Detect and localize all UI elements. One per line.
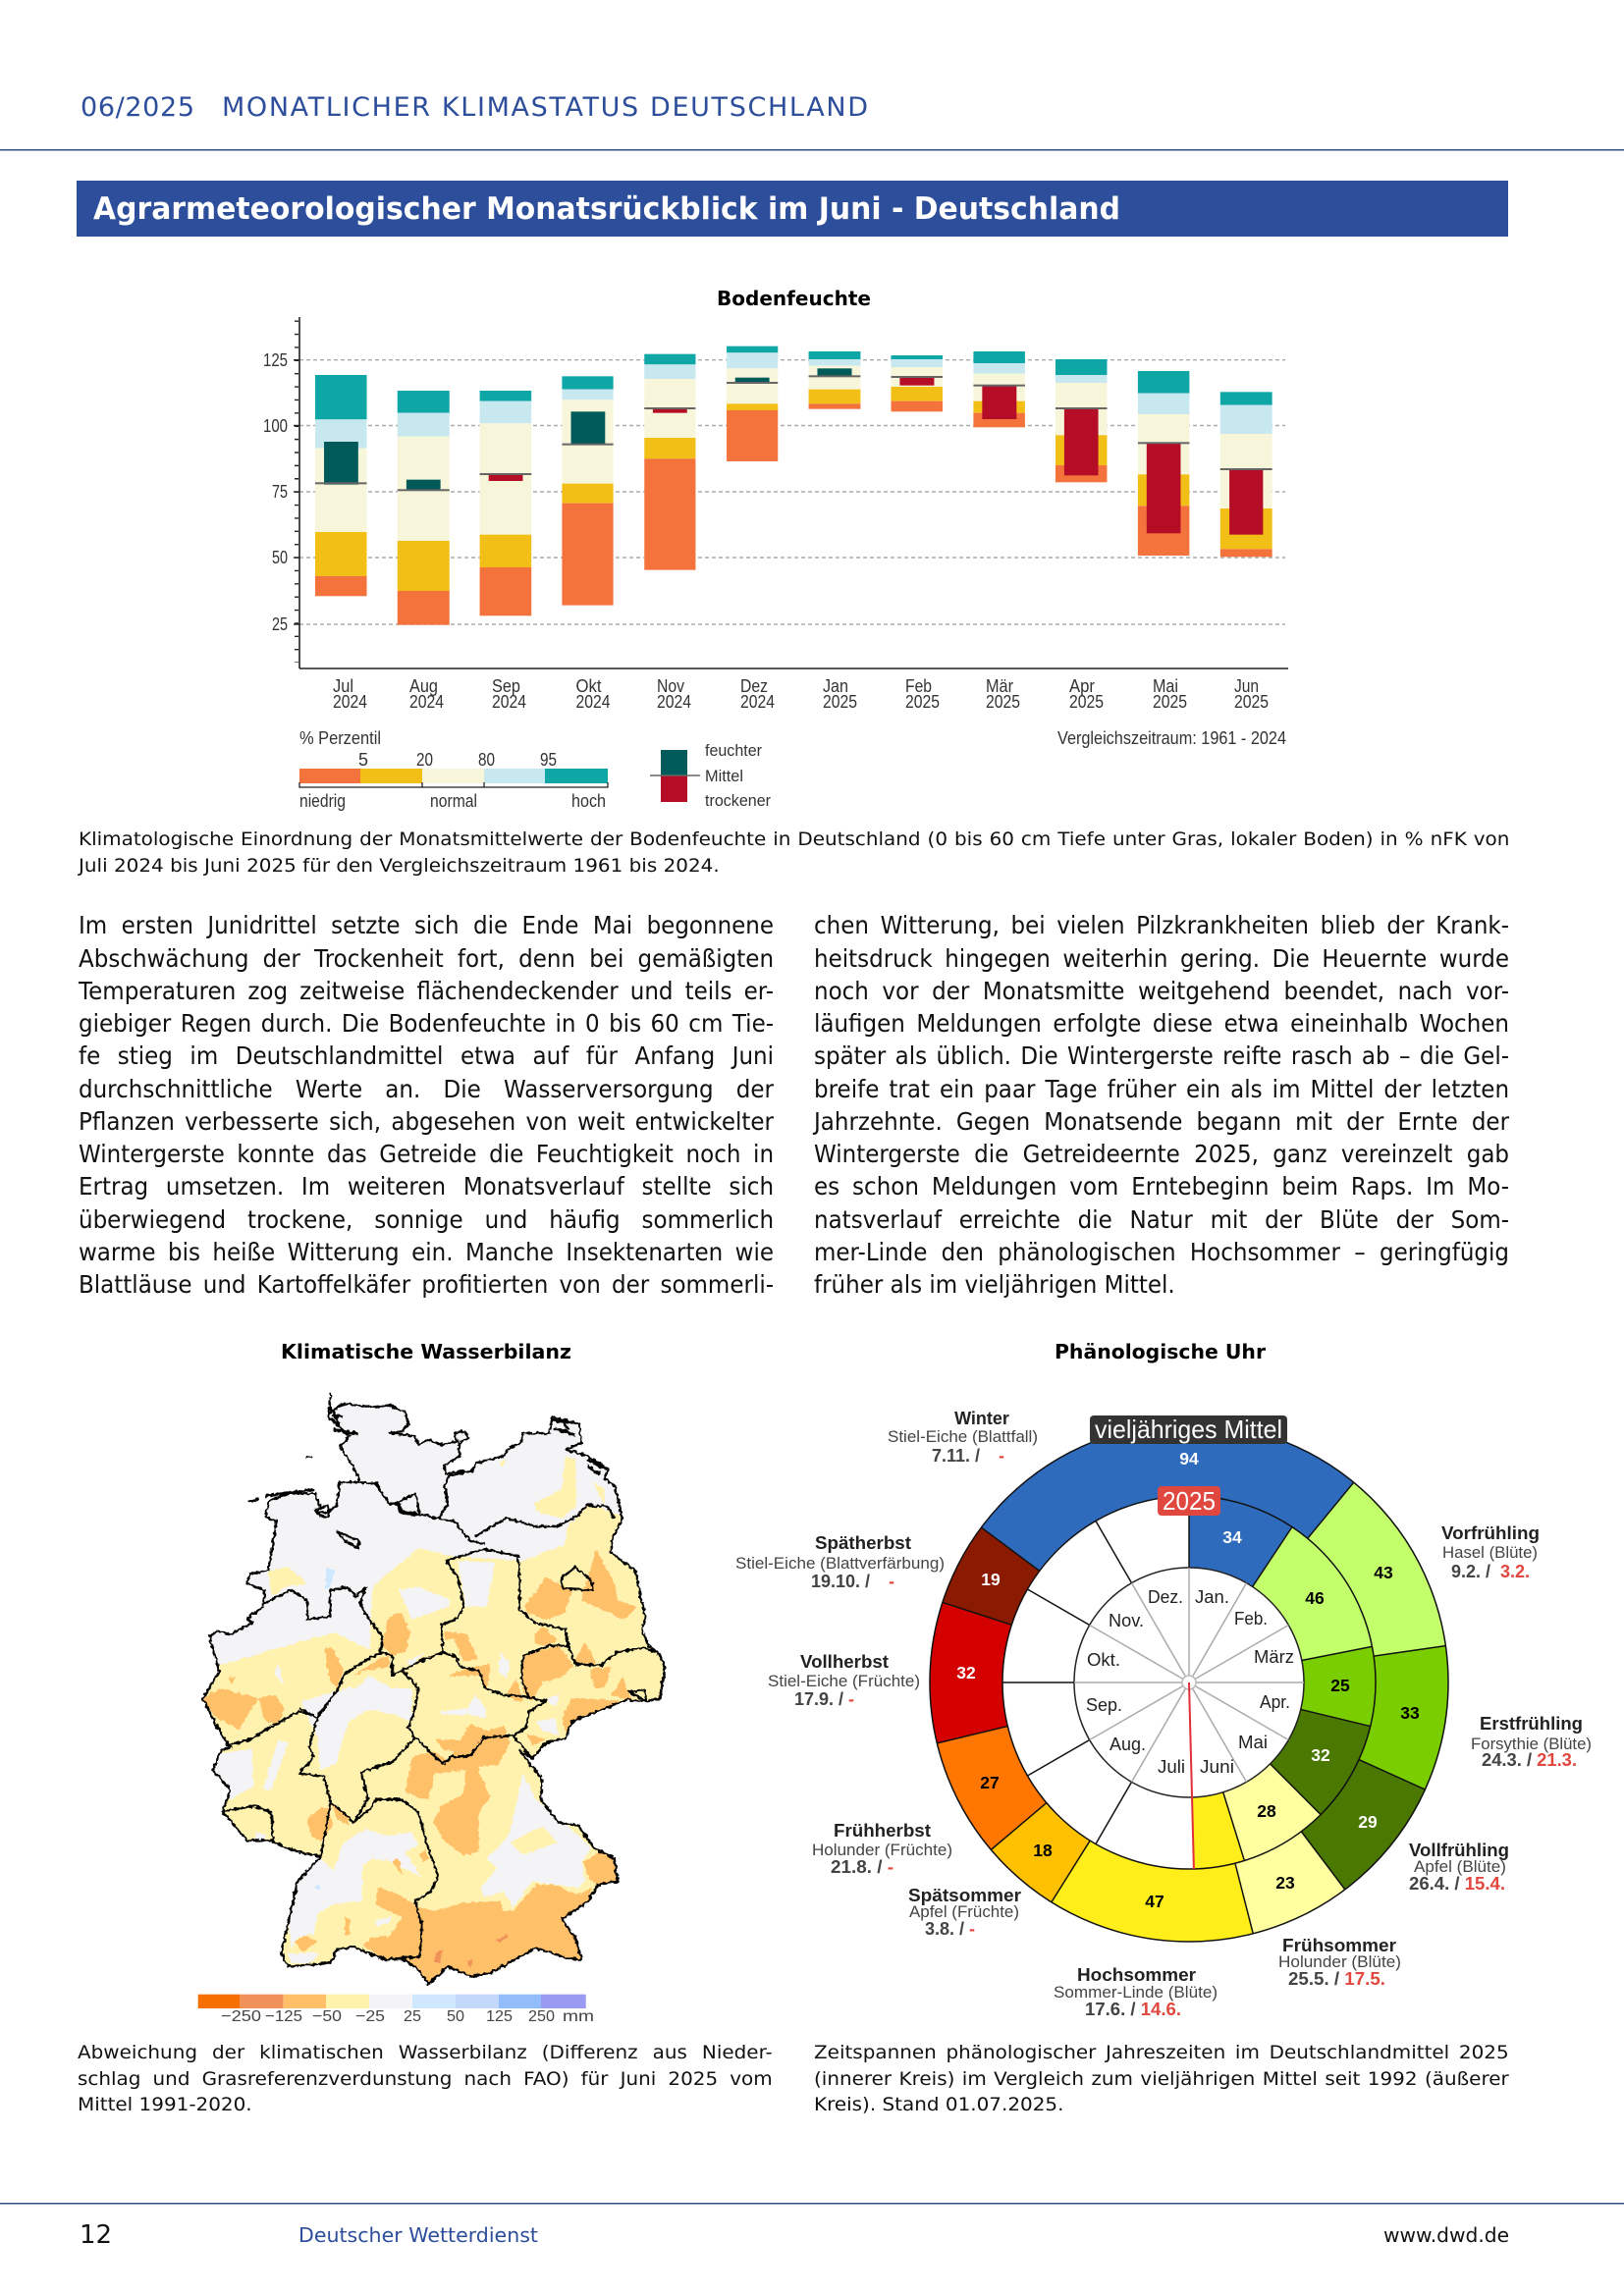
map colour legend: 50 (447, 2008, 464, 2025)
text block: right column: Jahrzehnte. Gegen Monatsende begann mit der Ernte der (814, 1107, 1509, 1136)
label: Winter: 7.11. / - (932, 1446, 1004, 1466)
label: Vorfrühling: Vorfrühling (1441, 1523, 1540, 1543)
text block: right column: später als üblich. Die Wintergerste reifte rasch ab – die Gel- (814, 1041, 1509, 1070)
map colour legend: 250 (528, 2008, 555, 2025)
x axis labels: 2025 (1234, 692, 1269, 712)
bar chart: Bodenfeuchte (263, 317, 1288, 712)
label: Vollfrühling: Vollfrühling (1409, 1841, 1509, 1860)
month labels: März (1254, 1647, 1294, 1667)
label: Spätsommer: 3.8. / - (925, 1919, 975, 1939)
caption: Wasserbilanz map: Mittel 1991-2020. (78, 2094, 252, 2115)
label: Winter: Stiel-Eiche (Blattfall) (888, 1427, 1038, 1446)
month labels: Nov. (1109, 1611, 1144, 1630)
x axis labels: Nov (657, 676, 684, 696)
note: reference period: Vergleichszeitraum: 1961 - 2024 (1057, 728, 1286, 748)
x axis labels: Jan (823, 676, 848, 696)
caption: Bodenfeuchte: Klimatologische Einordnung der Monatsmittelwerte der Bodenfeuchte in Deutschland (0 bis 60 cm Tiefe unter Gras, lokaler Boden) in % nFK von (79, 828, 1509, 850)
label: Frühherbst: 21.8. / - (831, 1857, 893, 1877)
text block: left column: überwiegend trockene, sonnige und häufig sommerlich (79, 1205, 774, 1233)
legend: anomaly direction (650, 741, 771, 810)
ring values: 28 (1257, 1801, 1276, 1821)
x axis labels: 2025 (986, 692, 1020, 712)
month labels: Okt. (1087, 1650, 1120, 1670)
map colour legend: −250 (221, 2008, 261, 2025)
x axis labels: 2025 (1069, 692, 1104, 712)
label: Vorfrühling: 9.2. / 3.2. (1451, 1562, 1530, 1581)
heading: Klimatische Wasserbilanz: Klimatische Wasserbilanz (281, 1340, 571, 1363)
label: Frühsommer: Frühsommer (1282, 1936, 1396, 1955)
text block: right column: chen Witterung, bei vielen Pilzkrankheiten blieb der Krank- (814, 911, 1509, 939)
label: Hochsommer: Hochsommer (1077, 1965, 1196, 1985)
ring values: 27 (980, 1773, 1000, 1792)
x axis labels: 2024 (657, 692, 691, 712)
legend: percentile colour scale: 95 (540, 750, 557, 770)
text block: left column (79, 911, 774, 1299)
bar: Mai 2025 (1138, 371, 1189, 556)
label: Spätherbst: 19.10. / - (811, 1572, 894, 1591)
y axis labels: 75 (272, 482, 288, 502)
label: Spätsommer: Apfel (Früchte) (909, 1902, 1019, 1921)
x axis labels: 2025 (823, 692, 857, 712)
label: Spätherbst (735, 1533, 945, 1591)
x axis labels: Sep (492, 676, 520, 696)
text block: left column: Im ersten Junidrittel setzte sich die Ende Mai begonnene (79, 911, 774, 939)
label: Vollfrühling: Apfel (Blüte) (1414, 1857, 1506, 1876)
bar: Feb 2025 (891, 355, 943, 411)
ring values: 46 (1305, 1588, 1325, 1608)
legend: percentile colour scale: % Perzentil (299, 728, 381, 748)
legend: percentile colour scale (299, 728, 608, 811)
legend: percentile colour scale: niedrig (299, 791, 346, 811)
badge: vieljähriges Mittel: vieljähriges Mittel (1095, 1415, 1282, 1444)
caption: Wasserbilanz map: schlag und Grasreferenzverdunstung nach FAO) für Juni 2025 vom (78, 2068, 773, 2090)
ring values: 19 (981, 1570, 1001, 1589)
label: Winter (888, 1409, 1038, 1466)
caption: phenological clock: Zeitspannen phänologischer Jahreszeiten im Deutschlandmittel 2025 (814, 2042, 1509, 2063)
label: Spätsommer (908, 1886, 1021, 1939)
x axis labels: Mai (1153, 676, 1178, 696)
title banner: Agrarmeteorologischer Monatsrückblick im Juni - Deutschland (93, 191, 1120, 227)
label: Hochsommer (1054, 1965, 1218, 2019)
text block: left column: warme bis heiße Witterung ein. Manche Insektenarten wie (79, 1238, 774, 1266)
bar: Apr 2025 (1056, 359, 1107, 482)
map colour legend: −125 (265, 2008, 302, 2025)
bar: Dez 2024 (727, 347, 778, 461)
caption: phenological clock (814, 2042, 1509, 2115)
legend: anomaly direction: trockener (705, 791, 771, 810)
ring values: 23 (1275, 1873, 1295, 1893)
text block: right column (813, 911, 1510, 1299)
bar: Jun 2025 (1220, 392, 1272, 557)
x axis labels: Feb (905, 676, 932, 696)
x axis labels: Okt (575, 676, 601, 696)
month labels: Juli (1158, 1757, 1185, 1777)
caption: phenological clock: Kreis). Stand 01.07.2025. (814, 2094, 1063, 2115)
text block: left column: Wintergerste konnte das Getreide die Feuchtigkeit noch in (79, 1140, 774, 1168)
text block: left column: Blattläuse und Kartoffelkäfer profitierten von der sommerli- (79, 1270, 774, 1299)
text block: right column: natsverlauf erreichte die Natur mit der Blüte der Som- (814, 1205, 1509, 1233)
label: Vollfrühling: 26.4. / 15.4. (1409, 1874, 1505, 1894)
caption: Bodenfeuchte: Juli 2024 bis Juni 2025 für den Vergleichszeitraum 1961 bis 2024. (79, 854, 720, 876)
footer: Deutscher Wetterdienst (298, 2223, 538, 2247)
text block: right column: breife trat ein paar Tage früher ein als im Mittel der letzten (814, 1075, 1509, 1103)
month labels: Dez. (1148, 1587, 1183, 1607)
label: Frühherbst (812, 1821, 952, 1877)
footer: 12 (80, 2220, 112, 2250)
caption: Wasserbilanz map (78, 2042, 773, 2115)
bar: Nov 2024 (644, 354, 695, 570)
chart: phenological clock (735, 1409, 1592, 2019)
ring values: 29 (1358, 1812, 1378, 1832)
map colour legend (198, 1995, 594, 2025)
text block: left column: Abschwächung der Trockenheit fort, denn bei gemäßigten (79, 944, 774, 973)
heading: Phänologische Uhr: Phänologische Uhr (1055, 1340, 1266, 1363)
text block: right column: läufigen Meldungen erfolgte diese etwa eineinhalb Wochen (814, 1009, 1509, 1038)
ring values: 32 (1311, 1745, 1330, 1765)
label: Vollherbst: Vollherbst (800, 1652, 889, 1672)
ring values: 94 (1179, 1449, 1199, 1468)
x axis labels: Aug (409, 676, 438, 696)
heading: Bodenfeuchte: Bodenfeuchte (717, 287, 871, 310)
label: Frühsommer: 25.5. / 17.5. (1288, 1969, 1385, 1989)
map colour legend: −25 (355, 2008, 385, 2025)
text block: left column: durchschnittliche Werte an. Die Wasserversorgung der (79, 1075, 774, 1103)
x axis labels: 2024 (575, 692, 611, 712)
chart axes (294, 317, 1288, 668)
ring values: 43 (1374, 1563, 1393, 1582)
map colour legend: −50 (312, 2008, 342, 2025)
map: Klimatische Wasserbilanz Germany (200, 1392, 668, 1986)
title banner (77, 181, 1508, 237)
footer: www.dwd.de (1383, 2223, 1509, 2247)
legend: percentile colour scale: hoch (571, 791, 606, 811)
month labels (1086, 1587, 1294, 1777)
ring values: 34 (1222, 1527, 1242, 1547)
label: Frühherbst: Holunder (Früchte) (812, 1841, 952, 1859)
bar: Sep 2024 (480, 391, 531, 615)
y axis labels: 50 (272, 548, 288, 567)
ring values: 32 (956, 1663, 976, 1682)
y axis labels (263, 350, 288, 634)
x axis labels: Apr (1069, 676, 1095, 696)
x axis labels: 2024 (492, 692, 526, 712)
label: Hochsommer: 17.6. / 14.6. (1085, 2000, 1181, 2019)
ring values (956, 1449, 1420, 1911)
caption: Bodenfeuchte (77, 828, 1509, 876)
x axis labels: 2025 (1153, 692, 1187, 712)
month labels: Juni (1200, 1757, 1234, 1777)
x axis labels: 2024 (333, 692, 367, 712)
header: issue and publication title: MONATLICHER KLIMASTATUS DEUTSCHLAND (222, 92, 868, 123)
bar: Mär 2025 (973, 351, 1025, 427)
label: Erstfrühling: 24.3. / 21.3. (1482, 1750, 1577, 1770)
y axis labels: 100 (263, 416, 288, 436)
y axis labels: 125 (263, 350, 288, 370)
text block: right column: noch vor der Monatsmitte weitgehend beendet, nach vor- (814, 977, 1509, 1005)
outer ring: long-term mean seasons (966, 1460, 1412, 1905)
label: Frühherbst: Frühherbst (834, 1821, 931, 1841)
bar: Aug 2024 (398, 391, 450, 625)
text block: left column: fe stieg im Deutschlandmittel etwa auf für Anfang Juni (79, 1041, 774, 1070)
ring values: 18 (1033, 1841, 1053, 1860)
x axis labels: Dez (740, 676, 768, 696)
footer (0, 2203, 1624, 2250)
text block: right column: mer-Linde den phänologischen Hochsommer – geringfügig (814, 1238, 1509, 1266)
legend: percentile colour scale: 80 (478, 750, 495, 770)
ring values: 33 (1400, 1703, 1420, 1723)
legend: anomaly direction: feuchter (705, 741, 762, 760)
label: Vollherbst (768, 1652, 920, 1709)
label: Vorfrühling (1441, 1523, 1540, 1581)
label: Vorfrühling: Hasel (Blüte) (1442, 1543, 1538, 1562)
legend: anomaly direction: Mittel (705, 767, 743, 785)
label: Spätherbst: Stiel-Eiche (Blattverfärbung) (735, 1554, 945, 1573)
caption: Wasserbilanz map: Abweichung der klimatischen Wasserbilanz (Differenz aus Nieder- (78, 2042, 773, 2063)
x axis labels: 2024 (409, 692, 444, 712)
month labels: Apr. (1260, 1692, 1290, 1712)
label: Vollfrühling (1409, 1841, 1509, 1894)
label: Erstfrühling: Forsythie (Blüte) (1471, 1735, 1592, 1753)
label: Spätsommer: Spätsommer (908, 1886, 1021, 1905)
text block: right column: heitsdruck hingegen weiterhin gering. Die Heuernte wurde (814, 944, 1509, 973)
label: Vollherbst: 17.9. / - (794, 1689, 854, 1709)
x axis labels: Jul (333, 676, 353, 696)
legend: percentile colour scale: normal (430, 791, 477, 811)
label: Hochsommer: Sommer-Linde (Blüte) (1054, 1983, 1218, 2002)
text block: left column: Temperaturen zog zeitweise flächendeckender und teils er- (79, 977, 774, 1005)
text block: left column: Ertrag umsetzen. Im weiteren Monatsverlauf stellte sich (79, 1172, 774, 1201)
month labels: Jan. (1195, 1587, 1229, 1607)
map colour legend: 125 (486, 2008, 513, 2025)
bar: Okt 2024 (562, 376, 614, 606)
badge: 2025: 2025 (1163, 1486, 1216, 1516)
label: Frühsommer: Holunder (Blüte) (1278, 1952, 1401, 1971)
bar: Jan 2025 (809, 351, 860, 409)
x axis labels: Mär (986, 676, 1013, 696)
x axis labels (333, 676, 1269, 712)
text block: right column: es schon Meldungen vom Erntebeginn beim Raps. Im Mo- (814, 1172, 1509, 1201)
inner ring: seasons 2025 (1039, 1531, 1339, 1834)
label: Erstfrühling (1471, 1714, 1592, 1770)
x axis labels: 2024 (740, 692, 775, 712)
ring values: 47 (1145, 1892, 1164, 1911)
Bundesland borders and coast (203, 1394, 665, 1985)
text block: left column: Pflanzen verbesserte sich, abgesehen von weit entwickelter (79, 1107, 774, 1136)
caption: phenological clock: (innerer Kreis) im Vergleich zum vieljährigen Mittel seit 1992 (äußerer (814, 2068, 1509, 2090)
legend: percentile colour scale: 5 (358, 750, 368, 770)
y axis labels: 25 (272, 614, 288, 634)
ring values: 25 (1330, 1676, 1350, 1695)
text block: left column: giebiger Regen durch. Die Bodenfeuchte in 0 bis 60 cm Tie- (79, 1009, 774, 1038)
x axis labels: Jun (1234, 676, 1259, 696)
month labels: Sep. (1086, 1695, 1122, 1715)
bar: Jul 2024 (315, 375, 367, 596)
red marker: current date (1189, 1682, 1194, 1869)
month labels: Mai (1238, 1733, 1268, 1752)
x axis labels: 2025 (905, 692, 940, 712)
label: Erstfrühling: Erstfrühling (1480, 1714, 1583, 1734)
map colour legend: mm (563, 2008, 594, 2025)
label: Spätherbst: Spätherbst (815, 1533, 911, 1553)
header: issue and publication title: 06/2025 (81, 92, 194, 123)
text block: right column: früher als im vieljährigen Mittel. (814, 1270, 1175, 1299)
label: Winter: Winter (954, 1409, 1009, 1428)
text block: right column: Wintergerste die Getreideernte 2025, ganz vereinzelt gab (814, 1140, 1509, 1168)
month labels: Aug. (1110, 1735, 1146, 1754)
label: Vollherbst: Stiel-Eiche (Früchte) (768, 1672, 920, 1690)
legend: percentile colour scale: 20 (416, 750, 433, 770)
label: Frühsommer (1278, 1936, 1401, 1989)
month labels: Feb. (1234, 1609, 1268, 1629)
map colour legend: 25 (404, 2008, 421, 2025)
